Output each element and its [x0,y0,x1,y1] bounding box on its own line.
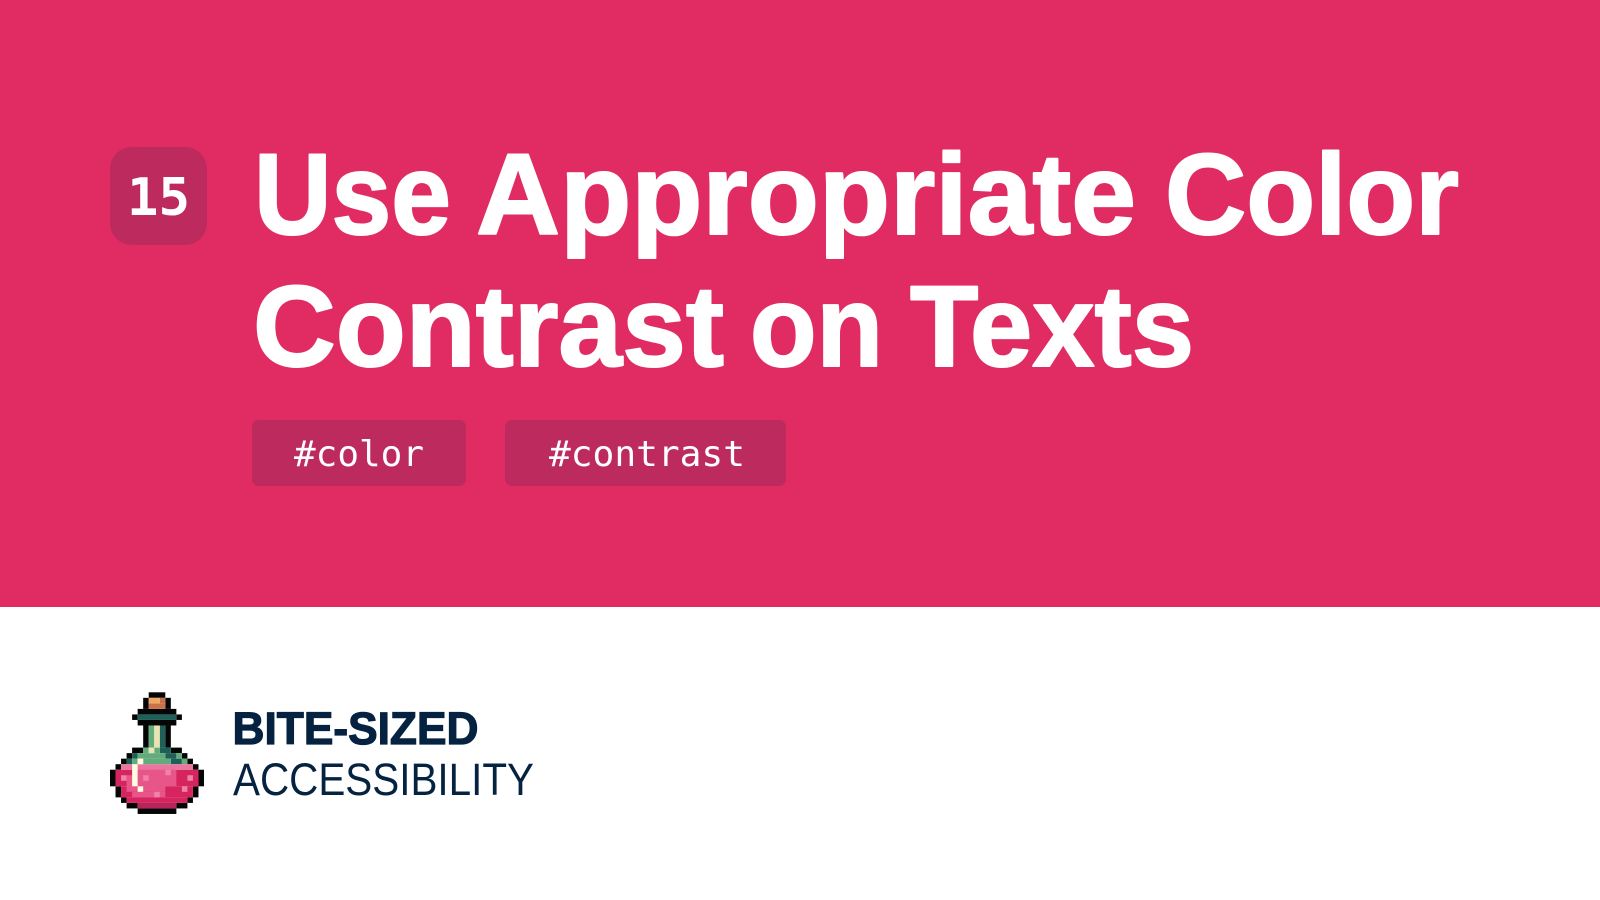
tag: contrast [505,420,786,486]
title: Appropriate [476,131,1136,259]
title: Texts [910,263,1194,391]
number badge [110,147,207,245]
brand wordmark: ACCESSIBILITY [233,754,534,805]
title: on [750,263,883,391]
brand wordmark: BITE-SIZED [232,703,478,754]
panel: red header [0,0,1600,607]
title [253,131,1459,391]
title: Contrast [253,263,724,391]
brand wordmark [232,703,534,805]
tag: contrast: #contrast [549,434,745,475]
tag: color [252,420,466,486]
icon: pixel potion [110,692,204,814]
title: Use [254,131,451,259]
title: Color [1165,131,1459,259]
number badge: 15 [127,168,190,228]
tag: color: #color [294,434,424,475]
